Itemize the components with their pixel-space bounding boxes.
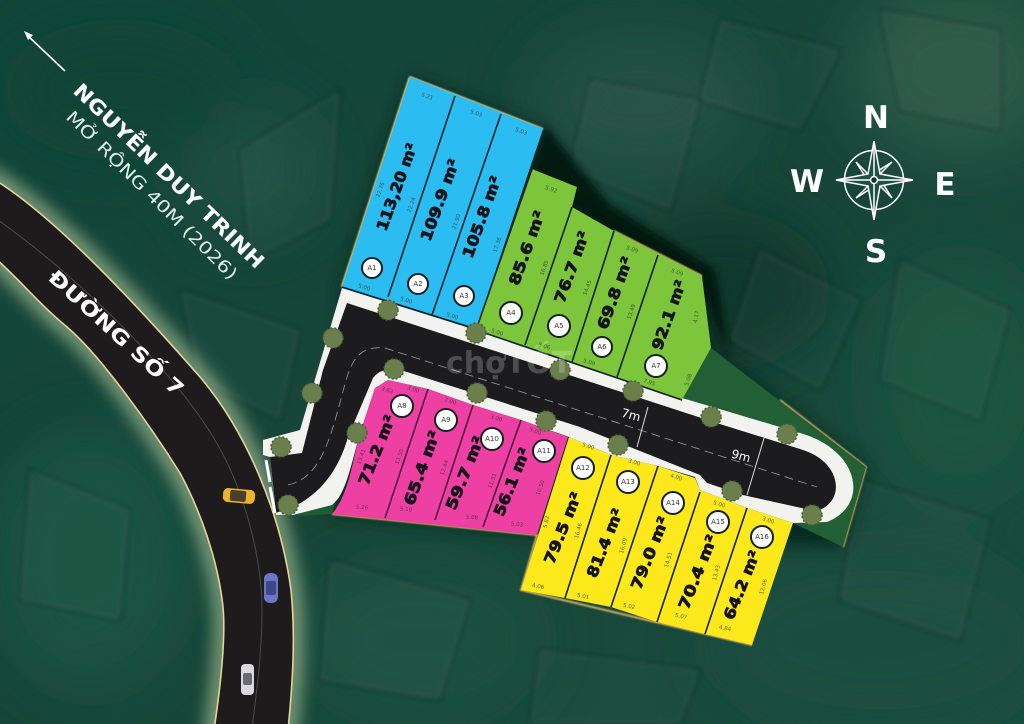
block: green lots A4-A7: A6 xyxy=(597,343,607,351)
block: yellow lots A12-A16: 13.43 xyxy=(712,564,722,581)
block: pink lots A8-A11: 71.2 m² xyxy=(355,412,399,488)
block: blue lots A1-A3: 113,20 m² xyxy=(373,141,421,233)
block: pink lots A8-A11: 11.51 xyxy=(487,473,499,489)
internal road and sidewalk xyxy=(263,288,853,523)
block: blue lots A1-A3: 5.03 xyxy=(469,109,483,119)
block: pink lots A8-A11: A11 xyxy=(537,447,551,455)
block: blue lots A1-A3: 5.00 xyxy=(445,312,459,322)
block: yellow lots A12-A16: 16.09 xyxy=(619,537,629,554)
block: yellow lots A12-A16: 5.82 xyxy=(543,515,551,529)
block: yellow lots A12-A16: A12 xyxy=(576,464,590,472)
block: green lots A4-A7: 5.09 xyxy=(625,245,639,255)
title: NGUYỄN DUY TRINH xyxy=(69,76,271,273)
block: blue lots A1-A3: 22.76 xyxy=(375,181,387,198)
block: green lots A4-A7 xyxy=(476,169,711,400)
lot glow and shadow xyxy=(332,77,866,645)
block: pink lots A8-A11: A8 xyxy=(397,402,407,410)
block: pink lots A8-A11: 3.63 xyxy=(380,386,394,396)
block: pink lots A8-A11: 3.00 xyxy=(443,397,457,407)
car: white xyxy=(241,664,254,695)
block: yellow lots A12-A16: 16.46 xyxy=(574,522,584,539)
compass: S xyxy=(865,234,887,270)
car: yellow xyxy=(222,488,256,504)
block: yellow lots A12-A16: 64.2 m² xyxy=(720,548,764,622)
block: green lots A4-A7: 5.08 xyxy=(684,373,694,387)
road: Duong so 7 xyxy=(0,180,293,724)
block: green lots A4-A7: 4.17 xyxy=(693,310,701,324)
road width 7m: 7m xyxy=(620,406,642,424)
block: green lots A4-A7: 69.8 m² xyxy=(594,254,636,332)
block: blue lots A1-A3: A3 xyxy=(459,292,469,300)
block: yellow lots A12-A16: 4.06 xyxy=(531,583,545,591)
block: pink lots A8-A11: 5.03 xyxy=(511,521,524,529)
block: green lots A4-A7: 76.7 m² xyxy=(551,229,593,305)
subtitle: MỞ RỘNG 40M (2026) xyxy=(61,105,243,284)
block: green lots A4-A7: A4 xyxy=(506,309,516,317)
block: blue lots A1-A3: A2 xyxy=(413,280,423,288)
block: pink lots A8-A11: 56.1 m² xyxy=(490,445,534,519)
block: green lots A4-A7: 7.95 xyxy=(642,378,656,388)
block: pink lots A8-A11: 5.08 xyxy=(466,514,479,522)
block: blue lots A1-A3: 22.24 xyxy=(406,196,418,213)
block: pink lots A8-A11 xyxy=(332,380,568,535)
compass: W xyxy=(790,164,824,200)
block: green lots A4-A7: 5.00 xyxy=(490,328,504,338)
block: green lots A4-A7: 14.45 xyxy=(582,279,594,296)
block: blue lots A1-A3: A1 xyxy=(367,264,377,272)
block: blue lots A1-A3: 21.90 xyxy=(451,213,463,230)
block: yellow lots A12-A16: 79.5 m² xyxy=(540,489,586,567)
block: yellow lots A12-A16: 5.00 xyxy=(712,500,726,510)
block: pink lots A8-A11: 13.50 xyxy=(394,448,406,465)
block: pink lots A8-A11: 3.00 xyxy=(489,414,503,424)
compass xyxy=(790,100,956,270)
block: green lots A4-A7: 16.85 xyxy=(539,259,551,276)
block: pink lots A8-A11: 5.26 xyxy=(356,504,369,512)
block: pink lots A8-A11: 5.00 xyxy=(528,427,542,437)
block: pink lots A8-A11: 12.44 xyxy=(439,459,451,476)
block: blue lots A1-A3: 109.9 m² xyxy=(417,157,463,243)
block: pink lots A8-A11: 5.19 xyxy=(400,506,413,514)
block: green lots A4-A7: 13.49 xyxy=(626,303,638,320)
arrow xyxy=(24,31,65,71)
block: pink lots A8-A11: 65.4 m² xyxy=(400,428,444,508)
block: yellow lots A12-A16: 3.00 xyxy=(761,516,775,526)
block: blue lots A1-A3: 5.00 xyxy=(357,283,371,293)
block: green lots A4-A7: 5.09 xyxy=(670,268,684,278)
block: blue lots A1-A3: 5.21 xyxy=(420,92,434,102)
block: yellow lots A12-A16 xyxy=(521,437,793,645)
block: yellow lots A12-A16: A16 xyxy=(755,533,769,541)
block: yellow lots A12-A16: A14 xyxy=(666,499,680,507)
block: yellow lots A12-A16: A13 xyxy=(621,478,635,486)
block: pink lots A8-A11: 3.00 xyxy=(406,385,420,395)
block: yellow lots A12-A16: 5.00 xyxy=(581,442,595,452)
block: pink lots A8-A11: A9 xyxy=(441,416,451,424)
block: blue lots A1-A3: 105.8 m² xyxy=(459,174,505,260)
block: blue lots A1-A3: 5.03 xyxy=(514,127,528,137)
road width 9m xyxy=(730,435,765,495)
block: pink lots A8-A11: 10.50 xyxy=(535,479,547,496)
compass: N xyxy=(863,100,889,136)
block: yellow lots A12-A16: 14.51 xyxy=(664,552,674,568)
block: blue lots A1-A3: 5.00 xyxy=(399,296,413,306)
block: yellow lots A12-A16: 4.00 xyxy=(669,473,683,483)
car: blue xyxy=(264,573,278,603)
block: yellow lots A12-A16: 4.84 xyxy=(718,625,732,633)
block: green lots A4-A7: 5.09 xyxy=(582,358,596,368)
compass: E xyxy=(934,167,956,203)
green buffer land xyxy=(682,348,866,547)
block: yellow lots A12-A16: 5.07 xyxy=(674,613,688,621)
road label: ĐƯỜNG SỐ 7 xyxy=(44,264,190,401)
block: green lots A4-A7: 85.6 m² xyxy=(505,208,549,288)
block: pink lots A8-A11: A10 xyxy=(485,435,499,443)
block: green lots A4-A7: 92.1 m² xyxy=(648,278,690,352)
block: green lots A4-A7: A5 xyxy=(554,322,564,330)
block: yellow lots A12-A16: 79.0 m² xyxy=(627,514,673,592)
trees xyxy=(271,300,822,525)
block: blue lots A1-A3 xyxy=(342,77,543,329)
block: yellow lots A12-A16: 3.00 xyxy=(627,458,641,468)
block: green lots A4-A7: A7 xyxy=(651,362,661,370)
block: green lots A4-A7: 5.92 xyxy=(544,185,558,195)
road width 9m: 9m xyxy=(730,447,752,465)
block: yellow lots A12-A16: 5.02 xyxy=(622,603,636,611)
block: blue lots A1-A3: 17.36 xyxy=(492,236,504,253)
block: yellow lots A12-A16: 5.01 xyxy=(576,593,590,601)
block: green lots A4-A7: 5.06 xyxy=(537,342,551,352)
block: pink lots A8-A11: 59.7 m² xyxy=(442,433,488,513)
block: yellow lots A12-A16: 81.4 m² xyxy=(583,506,627,580)
block: yellow lots A12-A16: A15 xyxy=(711,518,725,526)
block: pink lots A8-A11: 13.41 xyxy=(356,449,368,465)
block: yellow lots A12-A16: 70.4 m² xyxy=(675,532,721,612)
watermark: chợTỐT xyxy=(446,340,573,381)
block: yellow lots A12-A16: 12.06 xyxy=(759,578,769,595)
road width 7m xyxy=(620,406,648,447)
